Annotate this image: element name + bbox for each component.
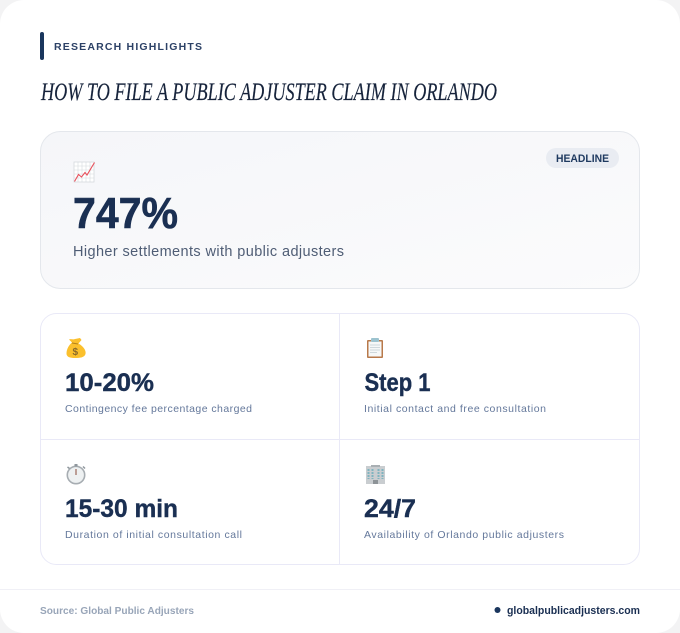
stat: availability: Availability of Orlando public adjusters (364, 529, 564, 541)
icon: office building (366, 465, 385, 484)
panel: stat grid (40, 314, 640, 564)
big number: 747% (73, 189, 178, 238)
description: Higher settlements with public adjusters (73, 244, 344, 260)
stat: contingency fee: Contingency fee percentage charged (65, 403, 252, 415)
eyebrow label: RESEARCH HIGHLIGHTS (54, 41, 202, 53)
stat: consultation length: 15-30 min (65, 495, 178, 523)
footer (0, 590, 680, 617)
stat: contingency fee (65, 338, 252, 415)
stat: consultation length (65, 464, 242, 541)
source: Source: Global Public Adjusters (40, 606, 194, 617)
icon: stopwatch (67, 464, 85, 484)
header: research highlights (40, 32, 202, 60)
stat: contingency fee: 10-20% (65, 369, 154, 397)
website: globalpublicadjusters.com (507, 605, 640, 617)
stat: first step: Step 1 (364, 369, 431, 397)
accent bar (40, 32, 44, 60)
stat: first step: Initial contact and free consultation (364, 403, 546, 415)
badge: headline: HEADLINE (556, 153, 609, 165)
icon: clipboard (367, 338, 383, 358)
stat: availability: 24/7 (364, 495, 416, 523)
icon: money bag (66, 338, 86, 358)
stat: consultation length: Duration of initial consultation call (65, 529, 242, 541)
stat: first step (364, 338, 546, 415)
icon: money bag: $ (72, 347, 78, 358)
stat: availability (364, 465, 564, 541)
title: HOW TO FILE A PUBLIC ADJUSTER CLAIM IN ORLANDO (40, 77, 497, 106)
badge: headline (546, 148, 619, 168)
icon: rising chart (74, 162, 94, 182)
panel: headline stat (40, 132, 640, 288)
